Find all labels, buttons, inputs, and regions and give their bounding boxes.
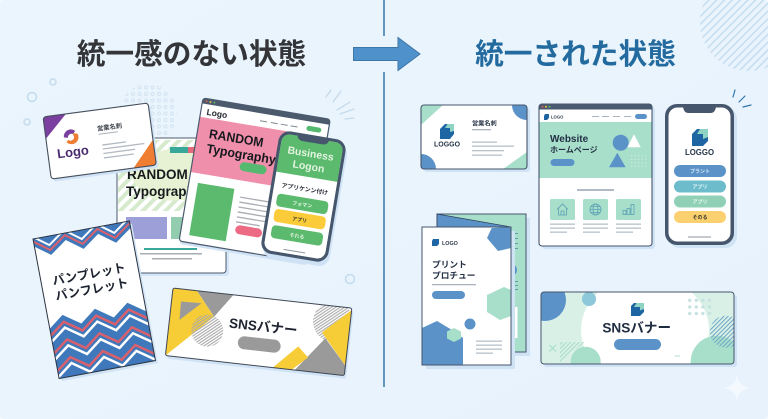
panel: unified phone: アプリ <box>692 198 708 206</box>
panel: unified browser: LOGO <box>551 114 564 120</box>
panel: brochure: LOGO <box>442 241 458 247</box>
panel: zigzag pamphlet: パンプレット <box>51 261 127 288</box>
panel: zigzag pamphlet <box>31 218 158 382</box>
left halftone dots <box>119 84 177 142</box>
panel: back web page: RANDOM <box>127 167 188 182</box>
decoration: sparkle <box>724 375 750 401</box>
divider <box>383 0 385 387</box>
panel: pink browser: Logo <box>206 107 228 120</box>
panel: brochure: プロチュー <box>432 270 475 280</box>
panel: random SNS banner: SNSバナー <box>228 316 298 338</box>
panel: unified business card: LOGGO <box>434 142 461 148</box>
panel: green phone: Business <box>287 144 335 164</box>
panel: unified business card: 営業名刺 <box>472 120 497 128</box>
icon: logo <box>692 129 708 146</box>
panel: unified phone: アプリ <box>692 184 708 190</box>
icon: house <box>557 204 568 215</box>
panel: green phone: アプリ <box>292 215 308 225</box>
panel: left business card <box>43 103 159 182</box>
panel: unified phone: プラント <box>690 168 710 175</box>
panel: unified SNS banner: SNSバナー <box>602 320 671 336</box>
panel: random SNS banner <box>165 284 355 379</box>
panel: left business card: 営業名刺 <box>96 121 123 133</box>
panel: back web page <box>117 138 229 276</box>
panel: back web page: Typography <box>126 184 203 199</box>
heading: left: 統一感のない状態 <box>77 39 306 71</box>
panel: green phone: Logon <box>292 158 325 175</box>
panel: green phone: アプリケンン付け <box>281 181 329 197</box>
panel: brochure: プリント <box>432 260 467 270</box>
panel: green phone <box>259 130 349 268</box>
icon: logo <box>63 128 79 145</box>
panel: zigzag pamphlet: パンフレット <box>54 276 129 303</box>
icon: globe <box>590 204 601 215</box>
right rays <box>733 90 751 107</box>
arrow <box>354 38 420 70</box>
panel: green phone: フォマン <box>292 201 312 210</box>
left rays <box>326 90 354 119</box>
panel: brochure <box>422 214 530 369</box>
icon: logo <box>440 124 454 139</box>
panel: green phone: それる <box>289 233 305 241</box>
panel: unified SNS banner <box>540 292 737 367</box>
panel: unified browser: Website <box>550 134 589 145</box>
icon: bar chart <box>623 204 634 214</box>
panel: pink browser <box>179 98 331 265</box>
panel: left business card: Logo <box>56 142 90 161</box>
panel: unified browser <box>539 104 655 249</box>
left decorative circles <box>24 79 354 284</box>
panel: unified phone <box>665 104 737 248</box>
icon: logo <box>631 303 644 316</box>
panel: unified browser: ホームページ <box>550 146 598 154</box>
panel: unified phone: そのる <box>692 215 708 221</box>
panel: unified business card <box>420 104 530 172</box>
heading: right: 統一された状態 <box>475 39 676 71</box>
panel: unified phone: LOGGO <box>685 148 714 157</box>
decoration: hatched circle top right <box>700 0 768 71</box>
panel: pink browser: Typography <box>206 141 278 167</box>
panel: pink browser: RANDOM <box>208 126 265 150</box>
